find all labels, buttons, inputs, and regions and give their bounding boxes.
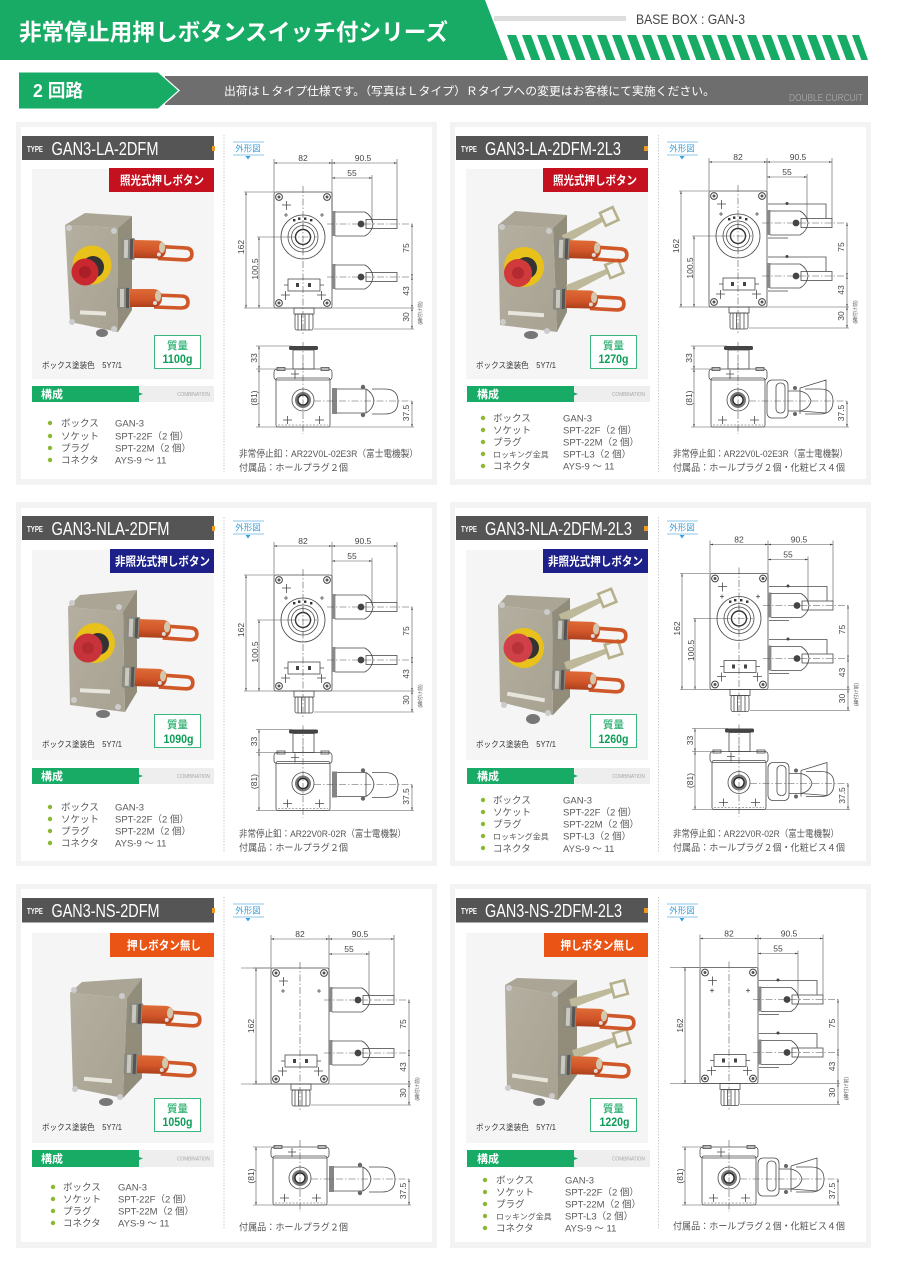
type badge [543,549,648,573]
parts list [48,418,191,466]
header stripes [503,35,868,60]
parts list: コネクタ [61,838,99,850]
type badge [110,933,214,957]
side drawing: 33 [249,353,259,363]
combination bar [32,768,214,784]
combination bar: COMBINATION [612,1156,645,1162]
front drawing: 90.5 [790,152,807,162]
combination bar: COMBINATION [612,774,645,780]
front drawing: 43 [401,286,411,296]
parts list: SPT-22F（2 個） [563,424,637,436]
front drawing: 30 [401,312,411,322]
front drawing: 55 [773,944,783,954]
front drawing: 75 [827,1019,837,1028]
parts list: GAN-3 [115,418,144,430]
front drawing: 162 [246,1019,256,1033]
type bar: TYPE [461,525,477,534]
side drawing: 37.5 [401,788,411,805]
front drawing: (締付け前) [417,684,424,708]
parts list: SPT-22M（2 個） [565,1198,641,1210]
parts list: SPT-22F（2 個） [563,806,637,818]
mass box: 質量 [603,339,624,352]
panel: GAN3-NS-2DFM-2L3 [450,884,871,1248]
side drawing: 33 [684,353,694,363]
mass box: 質量 [167,339,188,352]
product photo [466,169,648,379]
side drawing: (81) [675,1168,685,1184]
type badge [543,168,648,192]
panel: GAN3-LA-2DFM [16,122,437,485]
side drawing: 33 [249,737,259,746]
parts list: コネクタ [493,462,531,472]
front drawing: 82 [733,152,743,162]
combination bar: COMBINATION [612,392,645,398]
mass box: 質量 [603,1102,624,1115]
mass box [590,1098,636,1132]
outline tag: 外形図 [235,144,261,154]
parts list: SPT-22F（2 個） [565,1186,639,1198]
mass box: 1220g [600,1115,630,1129]
notes: 非常停止釦：AR22V0R-02R（富士電機製） [673,828,839,840]
front drawing: 82 [734,534,744,544]
parts list: ソケット [496,1188,534,1198]
outline tag [667,142,698,160]
front drawing: 90.5 [352,929,369,939]
side drawing: 37.5 [837,787,847,804]
parts list: SPT-22M（2 個） [563,436,639,448]
parts list: SPT-22F（2 個） [115,814,189,826]
front drawing: 100.5 [250,258,260,280]
parts list: ロッキング金具 [493,450,549,460]
front drawing: 90.5 [355,153,372,163]
type bar: GAN3-LA-2DFM [52,139,158,159]
notes [239,828,406,854]
front drawing [236,153,424,336]
parts list: AYS-9 ～ 11 [118,1218,169,1230]
side drawing: 37.5 [398,1182,408,1199]
outline tag [233,142,264,160]
front drawing: 75 [836,242,846,252]
front drawing: 100.5 [250,641,260,663]
front drawing: 30 [827,1088,837,1097]
section notice: 出荷はＬタイプ仕様です。（写真はＬタイプ）Ｒタイプへの変更はお客様にて実施ください。 [224,84,715,98]
notes: 非常停止釦：AR22V0L-02E3R（富士電機製） [239,448,418,460]
notes: 付属品：ホールプラグ２個 [239,462,348,474]
parts list: ボックス [61,418,99,430]
notes [673,828,845,854]
outline tag: 外形図 [669,144,695,154]
paint colour note: ボックス塗装色 5Y7/1 [42,1122,123,1132]
notes: 付属品：ホールプラグ２個・化粧ビス４個 [673,1220,845,1232]
side drawing: 37.5 [401,404,411,421]
outline tag [233,904,264,922]
type bar: GAN3-NLA-2DFM [52,519,170,539]
parts list: ソケット [493,426,531,436]
mass box: 1100g [162,352,192,366]
front drawing: 43 [398,1062,408,1072]
section bar [18,72,868,109]
front drawing: 55 [347,551,357,561]
parts list: ボックス [61,802,99,814]
header band [0,0,508,60]
product photo [466,933,648,1143]
side drawing: (81) [685,773,695,788]
combination bar [32,1150,214,1167]
type bar [22,516,215,540]
parts list [51,1182,194,1230]
front drawing: 30 [398,1088,408,1098]
type badge: 押しボタン無し [127,938,201,952]
type bar: GAN3-LA-2DFM-2L3 [485,139,621,159]
mass box: 1090g [164,732,194,746]
type badge: 照光式押しボタン [553,172,637,188]
front drawing: 75 [401,626,411,636]
combination bar: 構成 [41,769,63,783]
side drawing [685,724,850,816]
outline tag: 外形図 [669,522,695,532]
side drawing [249,726,414,818]
mass box: 質量 [167,1102,188,1115]
parts list: プラグ [61,442,90,454]
combination bar [467,768,650,784]
front drawing: (締付け前) [853,683,860,706]
type badge [544,933,648,957]
front drawing [670,928,850,1112]
front drawing [671,152,859,335]
front drawing: 55 [347,168,357,178]
mass box: 1260g [598,732,628,746]
front drawing: 43 [401,669,411,679]
parts list: SPT-22M（2 個） [115,826,191,838]
front drawing: (締付け前) [417,301,424,325]
notes: 付属品：ホールプラグ２個・化粧ビス４個 [673,462,845,474]
parts list: プラグ [61,826,90,838]
parts list [481,796,639,855]
parts list: SPT-22M（2 個） [563,818,639,830]
combination bar: COMBINATION [177,774,210,780]
parts list: コネクタ [493,844,531,855]
front drawing: (締付け前) [414,1077,421,1101]
mass box [590,714,636,748]
parts list: SPT-22M（2 個） [118,1206,194,1218]
type badge: 非照光式押しボタン [548,554,643,568]
type badge: 押しボタン無し [560,938,634,952]
front drawing: 82 [298,153,308,163]
parts list: ロッキング金具 [493,832,549,842]
parts list: GAN-3 [118,1182,147,1194]
parts list: GAN-3 [563,414,592,424]
type bar: TYPE [461,145,477,154]
paint colour note: ボックス塗装色 5Y7/1 [476,360,557,370]
double circuit label: DOUBLE CURCUIT [789,93,863,104]
front drawing [236,536,424,719]
type bar: GAN3-NLA-2DFM-2L3 [485,519,632,539]
front drawing: 82 [298,536,308,546]
parts list: GAN-3 [115,802,144,814]
parts list: SPT-L3（2 個） [563,830,631,842]
type badge: 非照光式押しボタン [115,554,210,568]
front drawing: 55 [783,550,793,560]
front drawing: 55 [344,944,354,954]
parts list: ロッキング金具 [496,1212,552,1222]
outline tag: 外形図 [235,906,261,916]
parts list: コネクタ [63,1218,101,1230]
parts list: AYS-9 ～ 11 [563,844,614,855]
combination bar: 構成 [477,1152,499,1166]
mass box [154,714,200,748]
side drawing: 33 [685,736,695,745]
parts list: ソケット [61,814,99,826]
combination bar: 構成 [41,387,63,401]
front drawing: 162 [672,621,682,636]
front drawing: 100.5 [686,640,696,661]
mass box [154,336,200,368]
mass box [154,1098,200,1132]
front drawing: 75 [401,243,411,253]
notes [239,448,418,474]
paint colour note: ボックス塗装色 5Y7/1 [476,1122,557,1132]
outline tag: 外形図 [235,522,261,532]
parts list [483,1176,641,1234]
side drawing [675,1140,840,1212]
type badge [110,549,214,573]
front drawing [672,534,860,718]
front drawing: (締付け前) [843,1077,850,1100]
paint colour note: ボックス塗装色 5Y7/1 [42,739,123,749]
type bar: GAN3-NS-2DFM-2L3 [485,901,622,921]
type bar: GAN3-NS-2DFM [52,901,160,921]
front drawing: 100.5 [685,257,695,279]
parts list: ボックス [496,1176,534,1186]
parts list: SPT-L3（2 個） [563,448,631,460]
product photo [32,933,214,1143]
outline tag [667,521,698,538]
front drawing: 55 [782,167,792,177]
parts list: プラグ [63,1206,92,1218]
mass box: 質量 [603,718,624,731]
type bar: TYPE [27,145,43,154]
front drawing: 30 [837,694,847,703]
front drawing: 82 [295,929,305,939]
parts list [48,802,191,850]
front drawing: 90.5 [791,534,808,544]
notes: 付属品：ホールプラグ２個・化粧ビス４個 [673,842,845,854]
front drawing: 162 [236,240,246,254]
type bar [456,136,648,160]
front drawing: 30 [836,311,846,321]
base box label: BASE BOX : GAN-3 [636,11,745,27]
front drawing [241,929,421,1112]
front drawing: 90.5 [781,928,798,938]
product photo [32,169,214,379]
combination bar: COMBINATION [177,392,210,398]
parts list: コネクタ [496,1224,534,1234]
parts list: ボックス [63,1182,101,1194]
panel: GAN3-NS-2DFM [16,884,437,1248]
parts list: ソケット [63,1194,101,1206]
front drawing: 75 [837,625,847,634]
parts list: GAN-3 [563,796,592,806]
combination bar [467,1150,650,1167]
side drawing: (81) [249,390,259,406]
front drawing: (締付け前) [852,300,859,324]
type bar: TYPE [27,907,43,916]
side drawing [246,1140,411,1212]
mass box: 1050g [162,1115,192,1129]
parts list: SPT-22M（2 個） [115,442,191,454]
notes: 付属品：ホールプラグ２個 [239,842,348,854]
type badge: 照光式押しボタン [120,172,204,188]
notes: 非常停止釦：AR22V0R-02R（富士電機製） [239,828,406,840]
parts list: プラグ [496,1198,525,1210]
parts list: ソケット [493,808,531,818]
front drawing: 43 [827,1062,837,1071]
side drawing [684,342,849,434]
side drawing: (81) [684,390,694,406]
parts list: SPT-22F（2 個） [115,430,189,442]
combination bar: 構成 [41,1152,63,1166]
combination bar: COMBINATION [177,1156,210,1162]
panel: GAN3-NLA-2DFM-2L3 [450,502,871,866]
side drawing [249,342,414,434]
parts list: AYS-9 ～ 11 [565,1224,616,1234]
product photo [466,550,648,760]
section heading: 2 回路 [33,81,83,101]
parts list [481,414,639,472]
front drawing: 30 [401,695,411,705]
notes [673,448,848,474]
parts list: ソケット [61,432,99,442]
front drawing: 75 [398,1019,408,1029]
mass box: 質量 [167,718,188,731]
side drawing: 37.5 [836,404,846,421]
parts list: プラグ [493,436,522,448]
outline tag: 外形図 [669,906,695,916]
type bar [456,516,648,540]
parts list: AYS-9 ～ 11 [115,456,166,466]
mass box [590,336,636,368]
front drawing: 43 [837,668,847,677]
notes: 付属品：ホールプラグ２個 [239,1222,348,1234]
parts list: ボックス [493,796,531,806]
product photo [32,550,214,760]
side drawing: 37.5 [827,1182,837,1199]
type bar [22,898,215,922]
paint colour note: ボックス塗装色 5Y7/1 [42,360,123,370]
front drawing: 162 [675,1018,685,1033]
parts list: AYS-9 ～ 11 [563,462,614,472]
type bar [456,898,648,922]
type badge [109,168,214,192]
combination bar [467,386,650,402]
combination bar: 構成 [477,387,499,401]
title: 非常停止用押しボタンスイッチ付シリーズ [19,19,448,45]
mass box: 1270g [598,352,628,366]
parts list: SPT-L3（2 個） [565,1210,633,1222]
front drawing: 162 [236,623,246,637]
side drawing: (81) [249,774,259,789]
front drawing: 90.5 [355,536,372,546]
grey header rule [494,16,626,21]
panel: GAN3-LA-2DFM-2L3 [450,122,871,485]
combination bar: 構成 [477,769,499,783]
front drawing: 82 [724,928,734,938]
parts list: AYS-9 ～ 11 [115,838,166,850]
type bar [22,136,215,160]
outline tag [233,521,264,538]
parts list: GAN-3 [565,1176,594,1186]
panel: GAN3-NLA-2DFM [16,502,437,866]
parts list: SPT-22F（2 個） [118,1194,192,1206]
notes: 非常停止釦：AR22V0L-02E3R（富士電機製） [673,448,848,460]
type bar: TYPE [27,525,43,534]
combination bar [32,386,214,402]
parts list: ボックス [493,414,531,424]
type bar: TYPE [461,907,477,916]
side drawing: (81) [246,1168,256,1184]
parts list: コネクタ [61,456,99,466]
parts list: プラグ [493,818,522,830]
front drawing: 162 [671,239,681,253]
paint colour note: ボックス塗装色 5Y7/1 [476,739,557,749]
front drawing: 43 [836,285,846,295]
outline tag [667,904,698,922]
